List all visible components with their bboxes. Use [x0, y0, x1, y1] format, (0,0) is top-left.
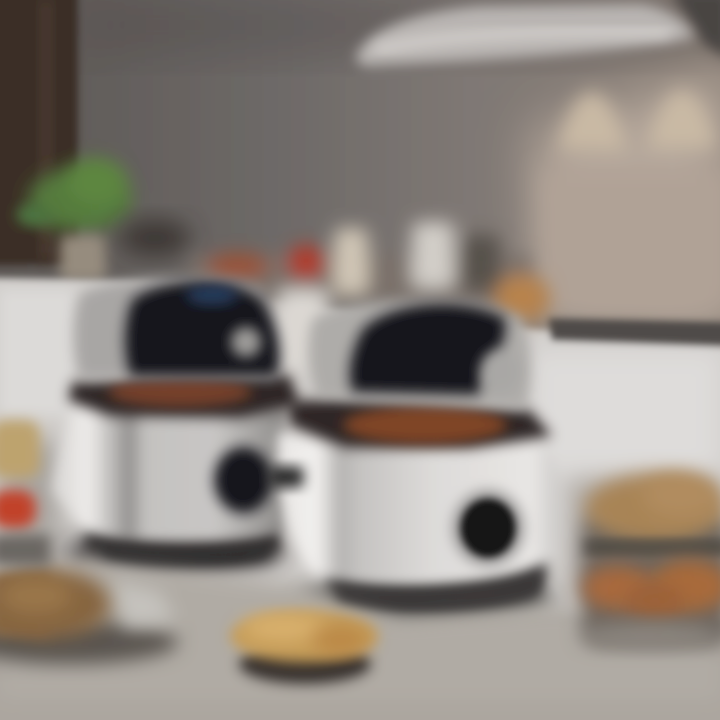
left fryer dial — [214, 447, 272, 513]
potted plant — [16, 158, 191, 281]
left fryer handle — [268, 466, 304, 488]
left fryer dark dome — [125, 282, 279, 376]
dark cabinet on left — [0, 0, 78, 265]
beige tiled backsplash on right — [530, 70, 720, 330]
right fryer dark dome — [350, 304, 506, 395]
shadow under fryers — [65, 532, 555, 618]
food and bottles behind the fryers — [190, 222, 550, 370]
right fryer base — [322, 562, 548, 610]
wall light glows — [558, 90, 716, 150]
right fryer sauce — [343, 406, 507, 444]
left fryer lid glint — [186, 285, 238, 305]
right fryer rim — [288, 398, 552, 448]
air fryer left — [52, 277, 300, 562]
right fryer lid highlight — [480, 350, 520, 394]
air fryer right — [268, 299, 561, 610]
left fryer sauce — [108, 377, 252, 407]
right fryer lid — [308, 299, 531, 408]
right fryer body — [278, 432, 561, 586]
right foreground baskets of food — [580, 473, 720, 649]
right fryer dial ring — [452, 490, 524, 566]
left edge food and tomato — [0, 420, 50, 565]
white counter back — [0, 278, 720, 620]
left fryer base — [85, 530, 280, 562]
fryer base edges over counter — [100, 545, 545, 610]
left foreground plate with food — [0, 570, 178, 664]
centre bowl with food — [230, 610, 378, 684]
right fryer dial — [460, 498, 516, 558]
countertop — [0, 560, 720, 720]
background wall — [0, 0, 720, 340]
range hood — [356, 0, 720, 66]
left fryer body — [52, 405, 285, 542]
left fryer rim — [68, 375, 300, 418]
left fryer lid — [74, 277, 279, 378]
